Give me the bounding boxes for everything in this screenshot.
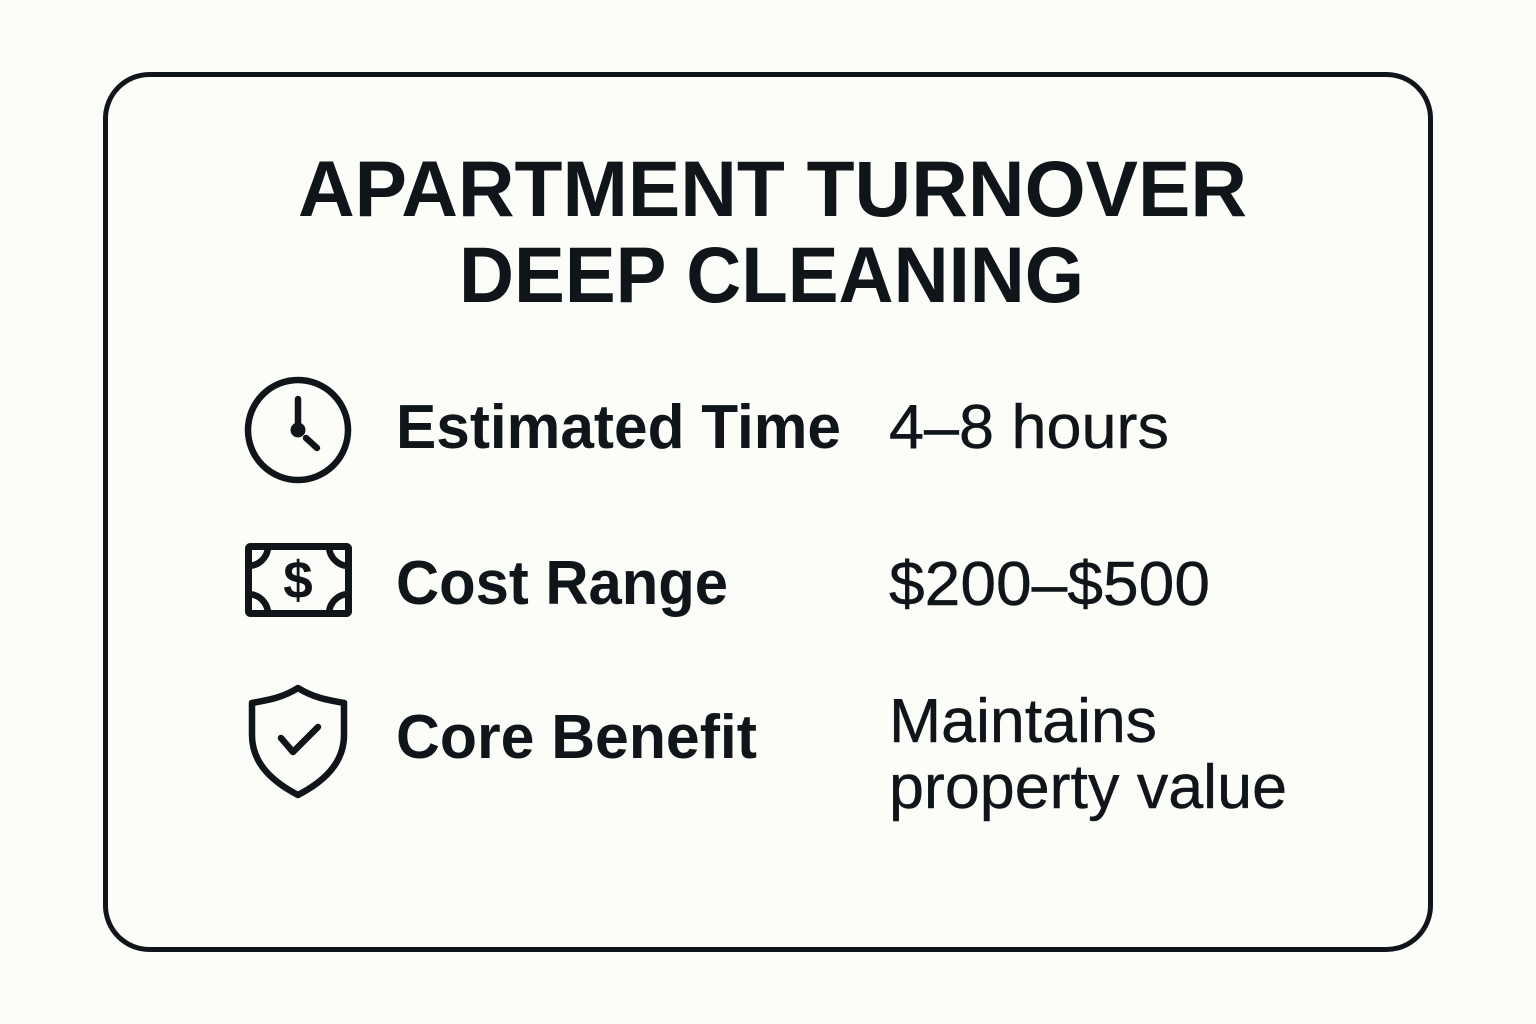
title: APARTMENT TURNOVER [298,144,1247,233]
row: estimated time [248,380,1169,480]
label: estimated time: Estimated Time [396,393,841,462]
icon: shield with check [252,688,344,795]
value: cost: $200–$500 [889,550,1210,619]
title: DEEP CLEANING [459,230,1084,319]
icon: dollar bill [248,546,349,614]
label: core benefit: Core Benefit [396,703,757,772]
icon: clock [248,380,348,480]
value: benefit: Maintains [889,687,1157,756]
row: core benefit [252,687,1287,822]
value: benefit: property value [889,753,1287,822]
value: benefit [889,687,1287,822]
title [298,144,1247,319]
label: cost range: Cost Range [396,549,728,618]
value: hours: 4–8 hours [889,393,1169,462]
row: cost range [248,546,1210,619]
icon: dollar bill: $ [283,551,313,610]
